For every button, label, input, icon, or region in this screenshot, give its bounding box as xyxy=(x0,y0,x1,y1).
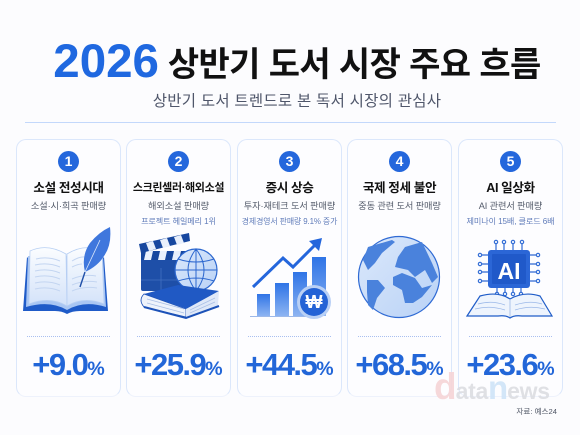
card 2 description: 해외소설 판매량 xyxy=(148,201,209,211)
card 2 percentage: +25.9% xyxy=(134,347,223,382)
number badge 5 xyxy=(500,151,521,172)
card 1 percentage: +9.0% xyxy=(32,347,105,382)
source note: 자료: 예스24 xyxy=(516,407,557,416)
subtitle: 상반기 도서 트렌드로 본 독서 시장의 관심사 xyxy=(153,93,441,110)
card 2 heading: 스크린셀러·해외소설 xyxy=(133,182,224,194)
number badge 4 xyxy=(389,151,410,172)
icon: AI chip over open book: AI xyxy=(498,258,520,284)
icon: earth globe xyxy=(358,236,440,318)
card 3 description: 투자·재테크 도서 판매량 xyxy=(244,201,335,211)
watermark: datanews: datanews xyxy=(434,366,550,407)
icon: AI chip over open book xyxy=(467,240,552,318)
icon: bar chart with rising arrow and won coin xyxy=(250,238,331,319)
card 5 note: 제미나이 15배, 클로드 6배 xyxy=(467,217,554,226)
card 2 note: 프로젝트 헤일메리 1위 xyxy=(141,217,216,226)
panel: card 2 screen-sellers xyxy=(126,139,231,397)
number badge 2 xyxy=(168,151,189,172)
number badge 3 xyxy=(279,151,300,172)
card 3 note: 경제경영서 판매량 9.1% 증가 xyxy=(242,217,337,226)
number badge 3: 3 xyxy=(286,153,293,169)
card 5 percentage: +23.6% xyxy=(466,347,555,382)
number badge 2: 2 xyxy=(175,153,182,169)
card 4 description: 중동 관련 도서 판매량 xyxy=(358,201,441,211)
icon: bar chart with rising arrow and won coin: ₩ xyxy=(306,292,322,312)
card 3 percentage: +44.5% xyxy=(245,347,334,382)
card 4 percentage: +68.5% xyxy=(355,347,444,382)
card 4 heading: 국제 정세 불안 xyxy=(363,181,436,195)
card 1 description: 소설·시·희곡 판매량 xyxy=(31,201,106,211)
number badge 5: 5 xyxy=(507,153,514,169)
panel: card 1 novels xyxy=(16,139,121,397)
icon: open book with feather xyxy=(23,227,110,314)
number badge 1: 1 xyxy=(65,153,72,169)
card 5 description: AI 관련서 판매량 xyxy=(479,201,542,211)
panel: card 5 AI xyxy=(458,139,563,397)
panel: card 4 geopolitics xyxy=(347,139,452,397)
title: 2026 상반기 도서 시장 주요 흐름 xyxy=(53,35,541,88)
card 3 heading: 증시 상승 xyxy=(266,181,313,195)
icon: clapperboard, globe and book xyxy=(139,233,219,318)
card 1 heading: 소설 전성시대 xyxy=(33,181,104,195)
number badge 4: 4 xyxy=(396,153,403,169)
number badge 1 xyxy=(58,151,79,172)
card 5 heading: AI 일상화 xyxy=(486,181,535,195)
panel: card 3 stock market xyxy=(237,139,342,397)
